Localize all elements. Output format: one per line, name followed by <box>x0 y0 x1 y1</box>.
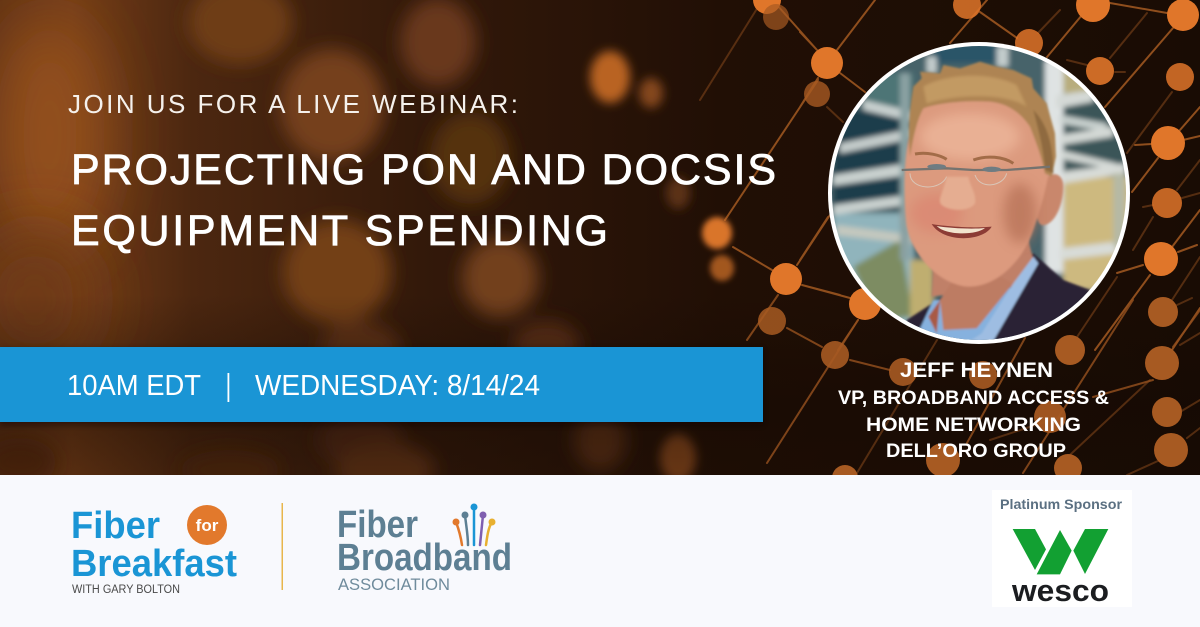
logo divider <box>282 503 283 590</box>
webinar title: PROJECTING PON AND DOCSIS <box>71 146 776 194</box>
date and time bar: 10AM EDT <box>67 370 201 402</box>
sponsor panel <box>992 490 1132 608</box>
logo: Fiber for Breakfast <box>71 505 237 596</box>
webinar title: EQUIPMENT SPENDING <box>71 207 608 255</box>
speaker name and title: VP, BROADBAND ACCESS & <box>838 388 1109 409</box>
headline: join us: JOIN US FOR A LIVE WEBINAR: <box>68 89 518 119</box>
portrait background building <box>827 40 1133 347</box>
network lines <box>700 0 1200 475</box>
logo: Fiber for Breakfast: for <box>196 516 219 535</box>
wesco logo mark <box>1013 529 1108 574</box>
speaker portrait <box>827 40 1133 347</box>
portrait nose and smile <box>932 177 992 238</box>
portrait jacket and shirt <box>905 240 1090 340</box>
portrait glasses <box>902 153 1050 187</box>
date and time bar: WEDNESDAY: 8/14/24 <box>255 370 540 402</box>
logo: Fiber Broadband Association: Broadband <box>337 537 512 579</box>
portrait ear, face, hair <box>904 62 1063 287</box>
logo: Fiber for Breakfast: Breakfast <box>71 543 237 585</box>
logo: Fiber Broadband Association: ASSOCIATION <box>338 575 450 594</box>
logo: Fiber for Breakfast: Fiber <box>71 505 160 547</box>
logo: Fiber Broadband Association <box>337 504 512 594</box>
hero background with bokeh <box>0 0 1200 498</box>
date and time bar <box>0 347 763 425</box>
speaker name and title: DELL’ORO GROUP <box>886 441 1066 462</box>
logo: Fiber for Breakfast: WITH GARY BOLTON <box>72 584 180 596</box>
sponsor panel: wesco <box>1011 573 1109 608</box>
sponsor panel: Platinum Sponsor <box>1000 496 1123 512</box>
speaker name and title: HOME NETWORKING <box>866 415 1081 436</box>
webinar title <box>71 146 776 255</box>
speaker name and title <box>838 359 1109 462</box>
speaker name and title: JEFF HEYNEN <box>900 359 1053 382</box>
footer band <box>0 475 1200 627</box>
network nodes <box>702 0 1199 491</box>
logo: Fiber Broadband Association: Fiber <box>337 504 418 546</box>
